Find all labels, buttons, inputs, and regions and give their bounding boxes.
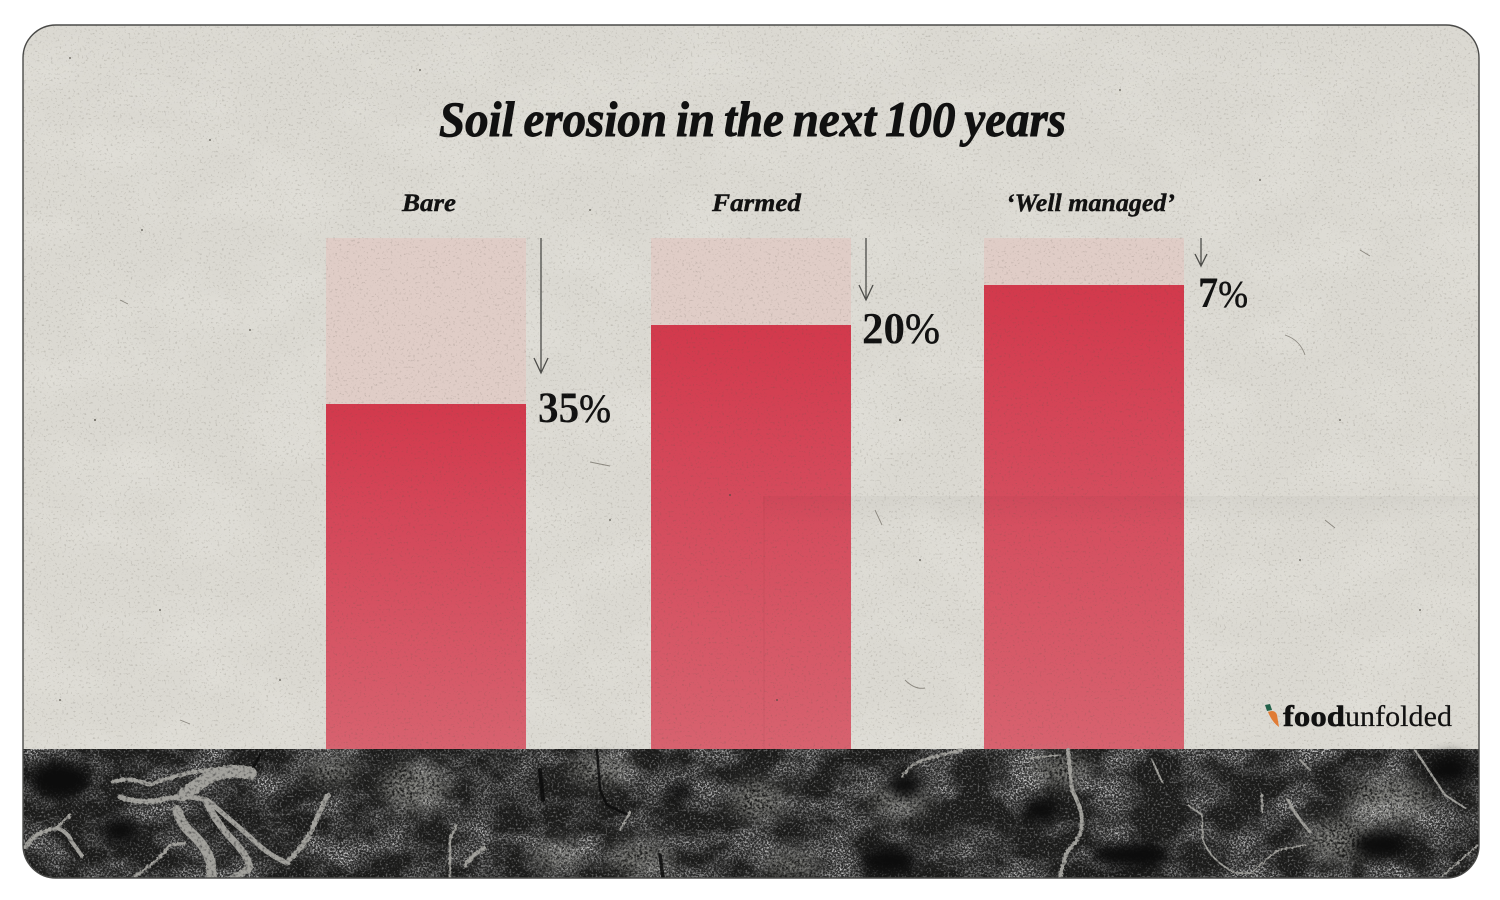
lighter clods [304,756,1432,876]
label: Well managed: ‘Well managed’ [1006,190,1175,217]
panel: paper card [24,26,1478,749]
icon: carrot [1265,704,1279,727]
arrow: Farmed [859,238,873,300]
arrow: Bare [534,238,548,373]
bar: Farmed [651,190,940,749]
logo: foodunfolded [1265,700,1452,733]
value: 20%: 20% [862,304,940,353]
paper texture overlay [23,25,1479,749]
label: Farmed: Farmed [711,190,802,217]
dark cracks and hollows [30,750,1472,878]
value: 7%: 7% [1198,270,1248,317]
logo: foodunfolded: unfolded [1345,700,1452,733]
bar: Bare [326,190,611,749]
label: Bare: Bare [401,190,456,217]
title: Soil erosion in the next 100 years [439,91,1066,147]
arrow: Well managed [1195,238,1207,266]
logo: foodunfolded: food [1283,700,1345,733]
roots: left cluster [25,769,484,878]
soil strip [23,749,1479,879]
bar: Well managed [984,190,1248,749]
roots: right strands [620,750,1478,878]
value: 35%: 35% [538,385,611,432]
